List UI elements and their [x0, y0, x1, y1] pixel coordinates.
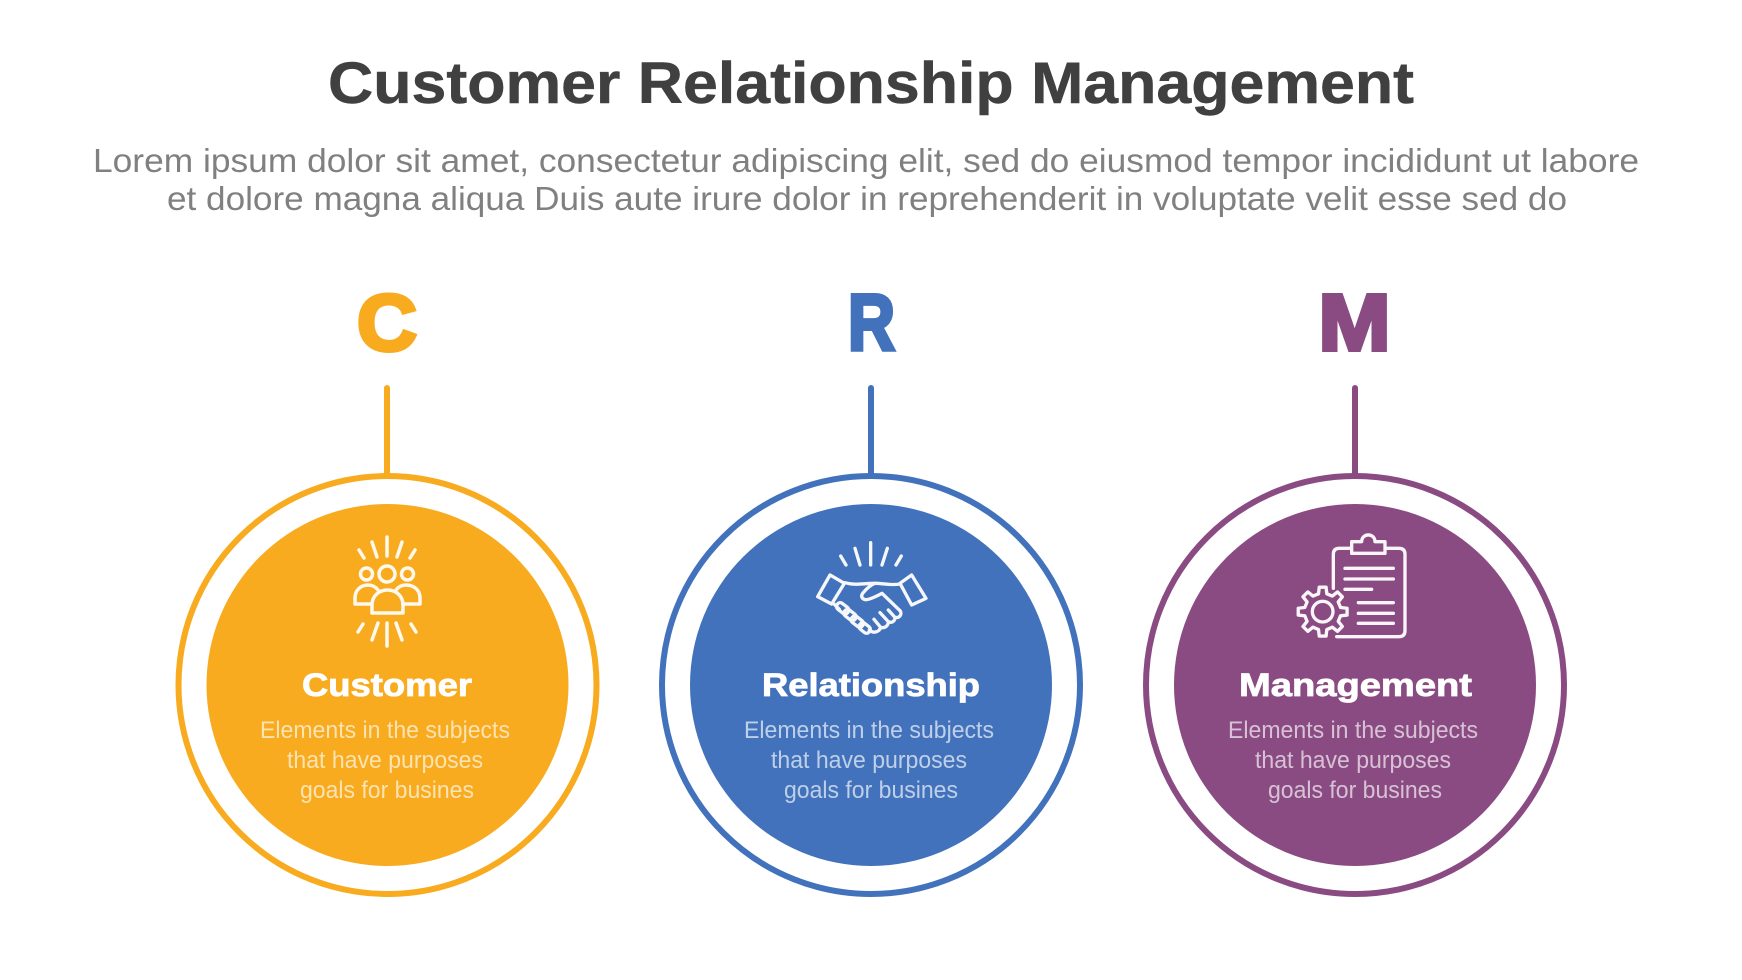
panel: relationship: [662, 278, 1080, 894]
outer ring: [178, 476, 596, 894]
description: [744, 717, 994, 804]
subtitle text block: [93, 142, 1639, 217]
description: Elements in the subjects: [1228, 717, 1478, 744]
inner circle: [690, 504, 1052, 866]
outer ring: [662, 476, 1080, 894]
heading: Management: Management: [1239, 667, 1472, 703]
description: that have purposes: [287, 747, 483, 774]
inner circle: [206, 504, 568, 866]
description: that have purposes: [771, 747, 967, 774]
heading: Relationship: Relationship: [762, 667, 980, 703]
description: Elements in the subjects: [744, 717, 994, 744]
heading: Customer: Customer: [302, 667, 472, 703]
letter M: M: [1318, 278, 1390, 367]
outer ring: [1146, 476, 1564, 894]
letter R: R: [848, 278, 895, 367]
description: that have purposes: [1255, 747, 1451, 774]
icon: handshake: [818, 543, 926, 635]
connector line: [1352, 388, 1358, 476]
icon: clipboard and gear: [1298, 535, 1405, 637]
letter C: C: [357, 278, 417, 367]
description: [1228, 717, 1478, 804]
panel: management: [1146, 278, 1564, 894]
description: goals for busines: [784, 777, 958, 804]
subtitle text block: et dolore magna aliqua Duis aute irure dolor in reprehenderit in voluptate velit esse sed do: [167, 180, 1567, 217]
connector line: [384, 388, 390, 476]
description: Elements in the subjects: [260, 717, 510, 744]
connector line: [868, 388, 874, 476]
description: goals for busines: [300, 777, 474, 804]
description: [260, 717, 510, 804]
subtitle text block: Lorem ipsum dolor sit amet, consectetur adipiscing elit, sed do eiusmod tempor incididunt ut labore: [93, 142, 1639, 179]
inner circle: [1174, 504, 1536, 866]
panel: customer: [178, 278, 596, 894]
icon: customers group: [355, 537, 420, 646]
description: goals for busines: [1268, 777, 1442, 804]
title: Customer Relationship Management: [328, 51, 1414, 116]
